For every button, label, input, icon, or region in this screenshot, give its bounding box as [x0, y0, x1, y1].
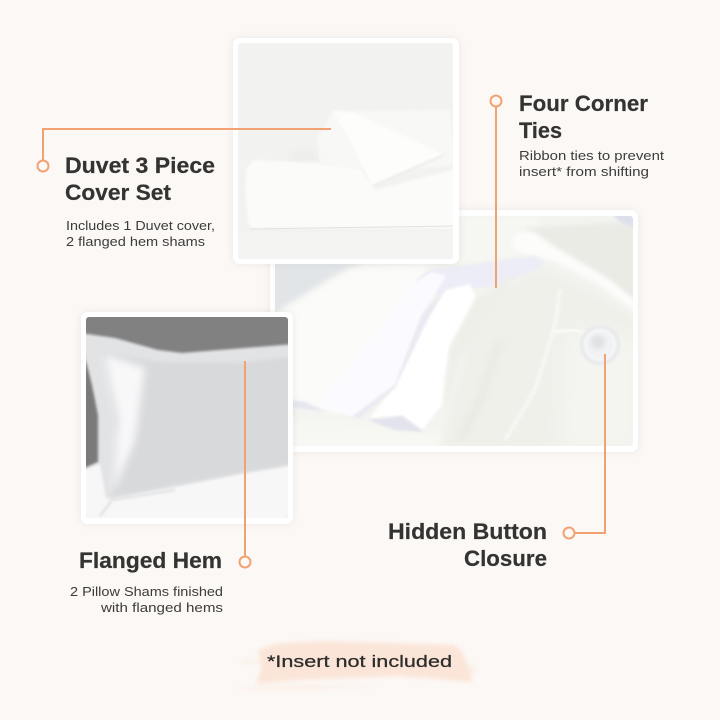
text: flanged hem description: 2 Pillow Shams finished [70, 584, 223, 599]
callout line: hidden button [564, 354, 605, 538]
heading: four corner ties: Four Corner [519, 91, 648, 116]
photo card: folded duvet set [230, 38, 465, 267]
text: duvet set description: Includes 1 Duvet cover, [66, 218, 215, 233]
heading: flanged hem: Flanged Hem [79, 548, 222, 573]
brush stroke highlight [235, 641, 478, 691]
text: duvet set description: 2 flanged hem shams [66, 234, 206, 249]
text: corner ties description: Ribbon ties to prevent [519, 148, 664, 163]
icon: clear button [580, 325, 620, 365]
callout line: corner ties [490, 96, 502, 288]
text: flanged hem description: with flanged hems [100, 600, 224, 615]
photo card: pillow sham with flanged hem [80, 312, 295, 530]
heading: hidden button closure: Closure [464, 546, 547, 571]
heading: duvet 3 piece cover set: Duvet 3 Piece [65, 153, 215, 178]
heading: duvet 3 piece cover set: Cover Set [65, 180, 172, 205]
heading: four corner ties: Ties [519, 118, 562, 143]
note: insert not included: *Insert not included [267, 652, 452, 671]
note: insert not included [235, 641, 478, 691]
heading: hidden button closure: Hidden Button [388, 519, 547, 544]
photo card: duvet closure detail [260, 210, 640, 460]
callout line: duvet set [38, 129, 331, 172]
callout line: flanged hem [240, 361, 250, 568]
text: corner ties description: insert* from shifting [519, 164, 649, 179]
